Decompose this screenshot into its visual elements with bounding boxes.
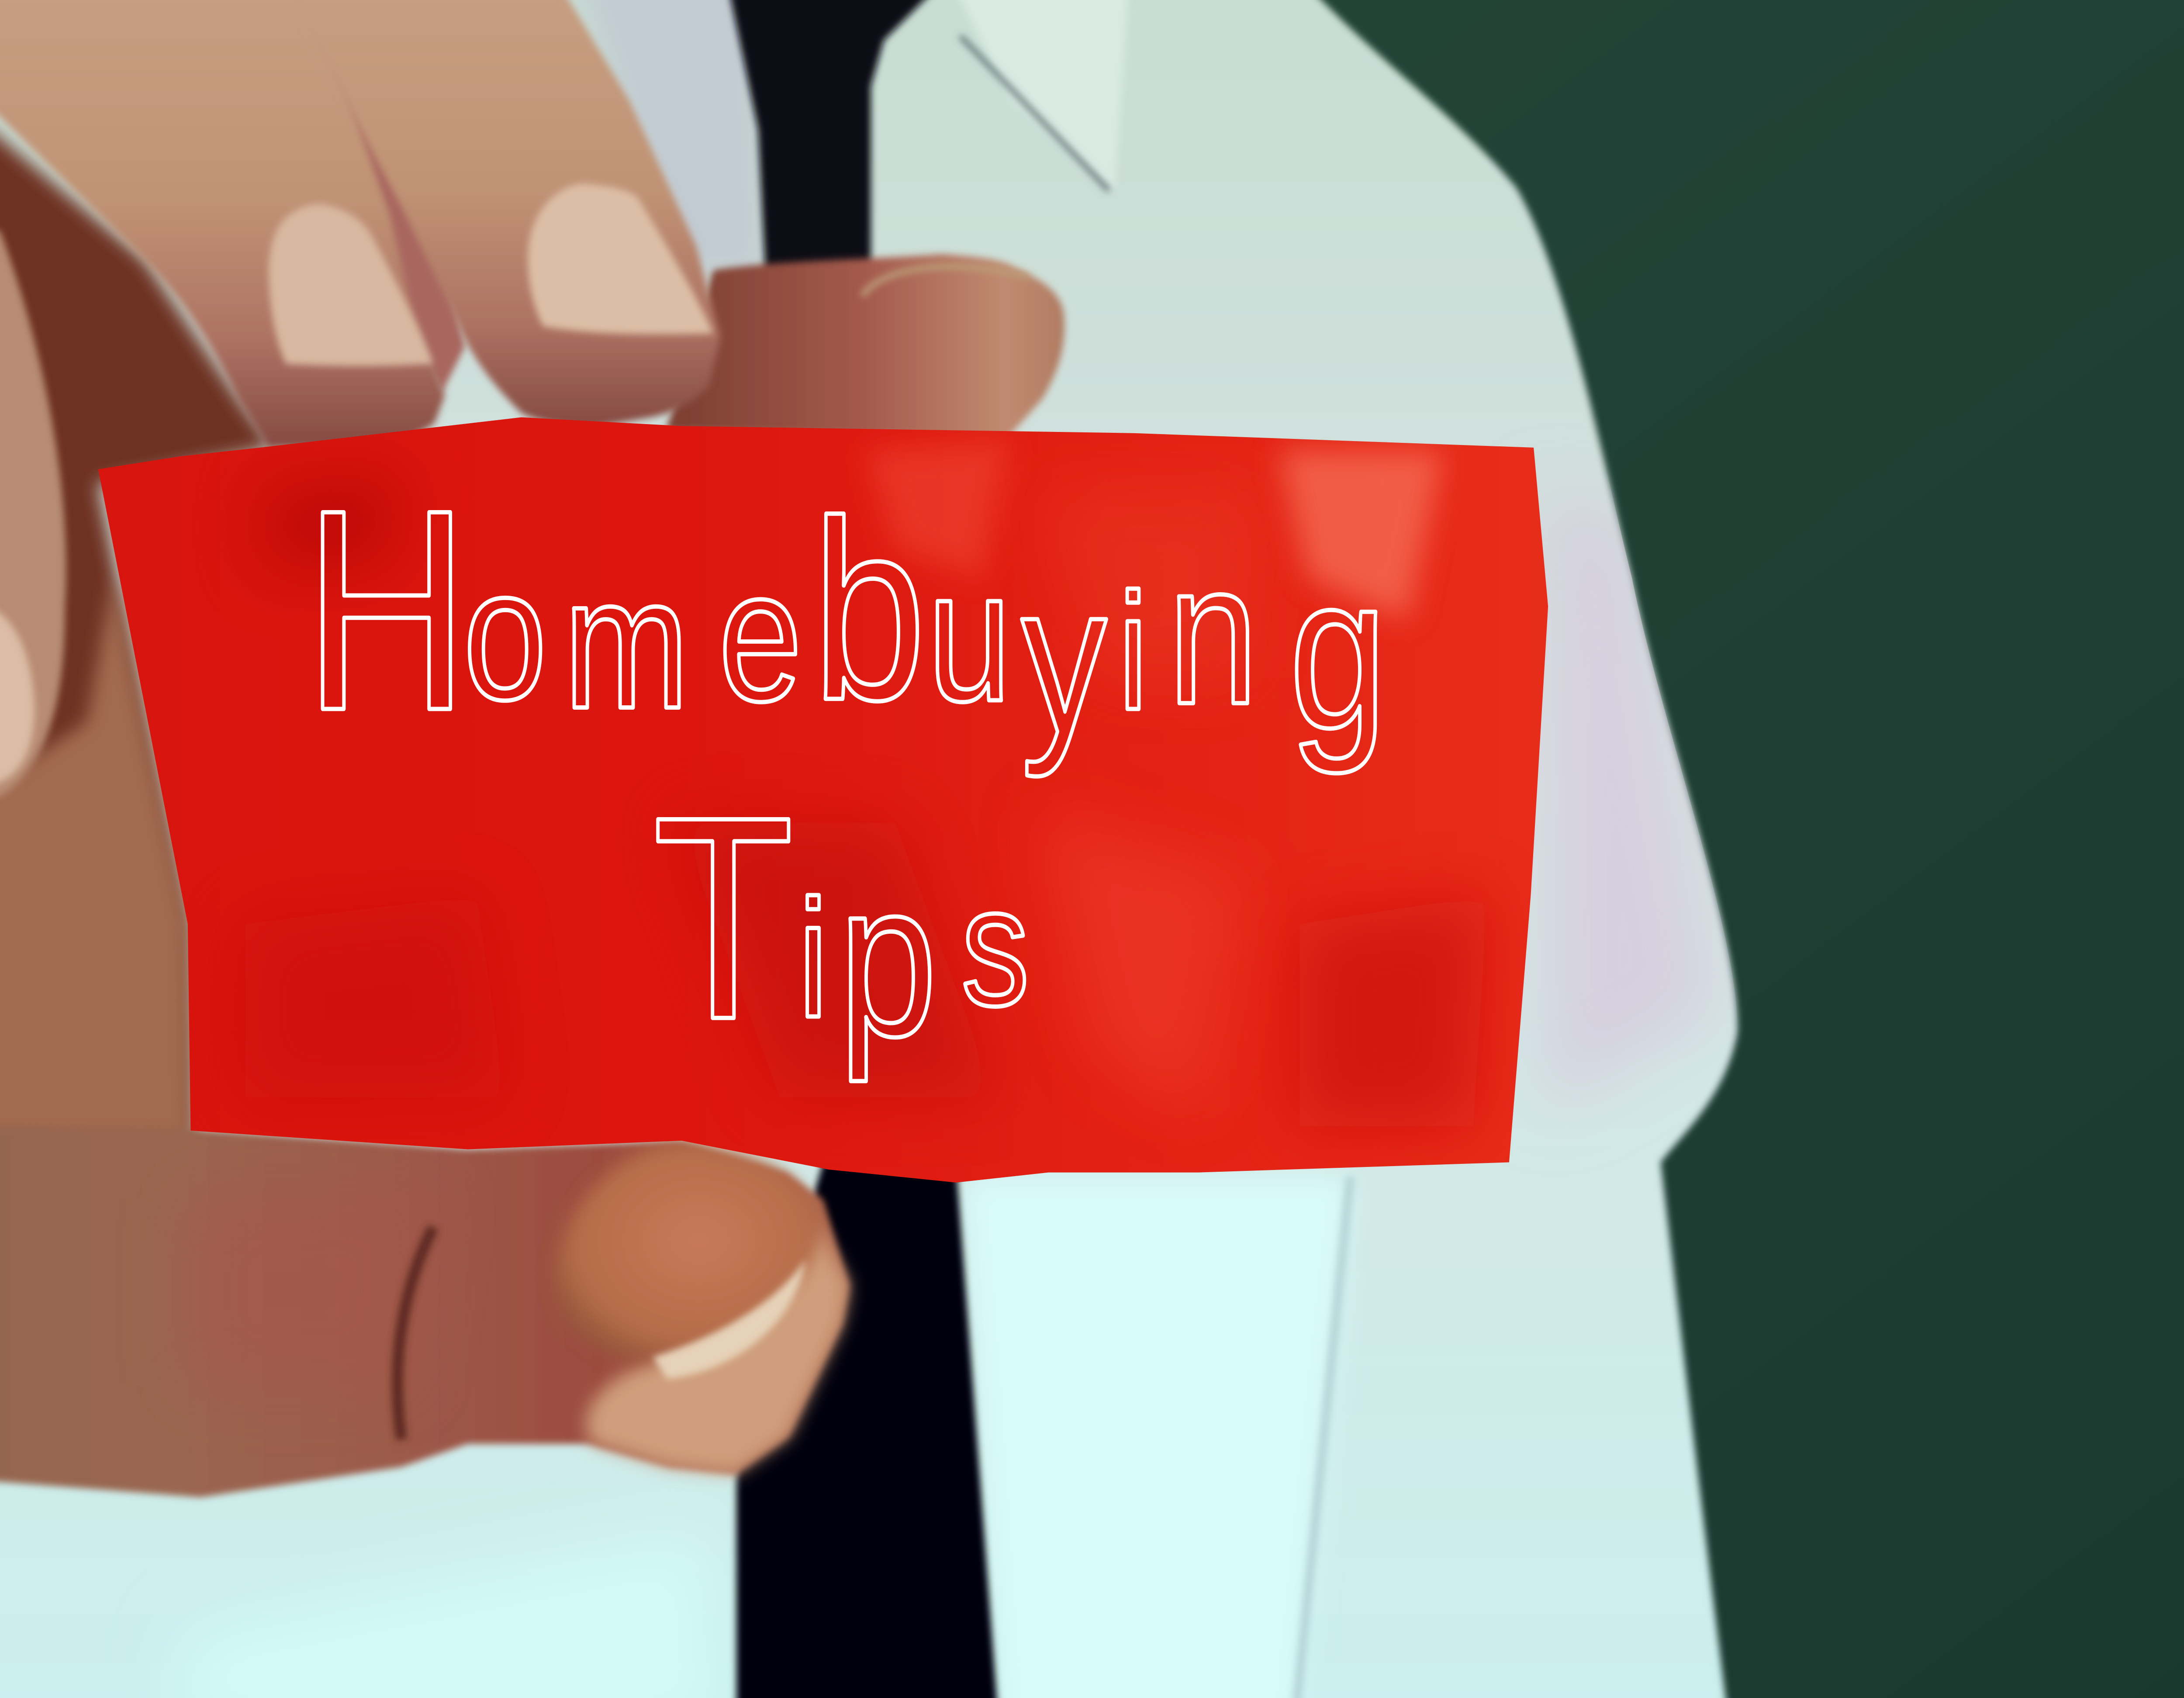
note text: Homebuying Tips: g (1289, 529, 1387, 776)
note text: Homebuying Tips: e (719, 531, 802, 740)
necktie (725, 0, 999, 1698)
hand: rear thumb behind note (666, 254, 1064, 439)
note text: Homebuying Tips (304, 450, 1387, 1084)
thumb skin below nail (586, 1227, 849, 1474)
icon: first fingernail (269, 204, 433, 366)
hand: second finger (269, 0, 721, 428)
red paper note (98, 417, 1548, 1183)
shirt: lower left bright fold (173, 1530, 722, 1698)
icon: thumbnail (653, 1259, 806, 1379)
note text: Homebuying Tips: b (812, 468, 926, 753)
note text: Homebuying Tips: i (1118, 559, 1148, 744)
icon: second fingernail (528, 184, 713, 334)
note text: Homebuying Tips: u (928, 531, 1011, 740)
palm pink patch (188, 1184, 433, 1386)
paper crease highlights (245, 440, 1487, 1126)
hand: left edge finger (0, 217, 66, 808)
shirt: seam shadow (1296, 1177, 1350, 1698)
note text: Homebuying Tips: T (653, 756, 794, 1079)
hand: first finger (0, 0, 445, 448)
note text: Homebuying Tips: H (304, 450, 469, 770)
note text: Homebuying Tips: n (1168, 521, 1258, 746)
shirt: bright placket (964, 1177, 1350, 1698)
note text: Homebuying Tips: o (463, 530, 547, 739)
shirt collar (953, 0, 1129, 190)
thumb pad (555, 1143, 817, 1358)
note text: Homebuying Tips: p (839, 835, 937, 1084)
note text: Homebuying Tips: i (798, 865, 828, 1052)
hand: palm and lower thumb (0, 101, 849, 1497)
shirt (0, 0, 1737, 1698)
photo: man holding red paper note (0, 0, 1743, 1698)
thumb wrinkle (397, 1227, 433, 1439)
note text: Homebuying Tips: s (961, 851, 1030, 1041)
note text: Homebuying Tips: y (1021, 538, 1107, 779)
shirt: grey shade left of tie (577, 0, 765, 274)
note text: Homebuying Tips: m (564, 538, 689, 748)
shirt: lavender sleeve shade (1545, 491, 1718, 1112)
hand: skin between fingers (274, 0, 465, 393)
